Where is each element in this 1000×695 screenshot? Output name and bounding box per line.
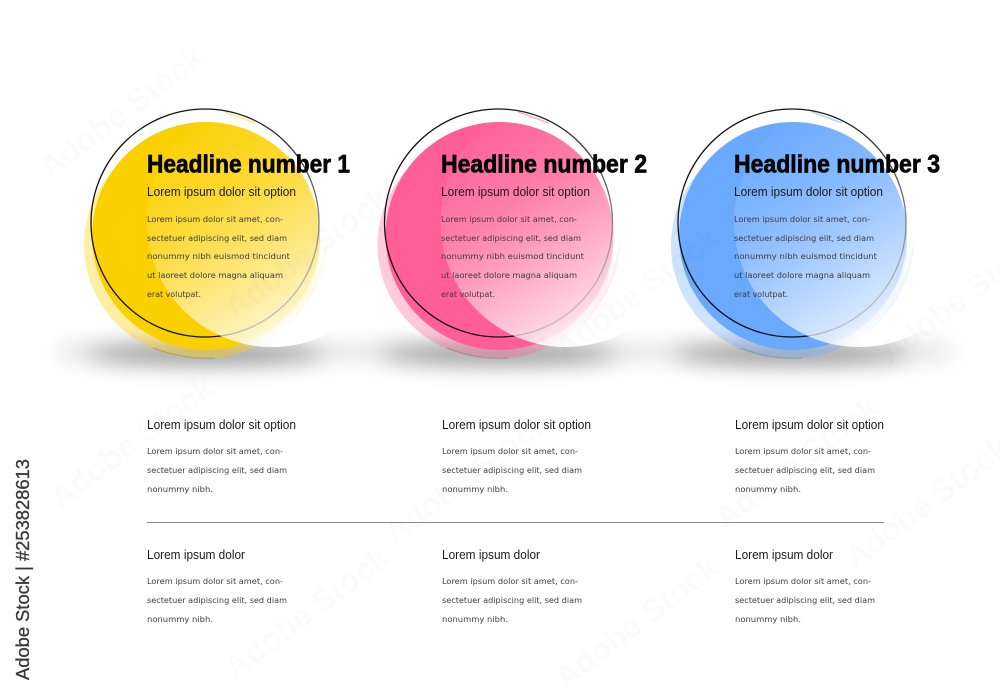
row 2 column 1 text: Lorem ipsum dolor sit amet, con- <box>147 576 283 586</box>
text block: headline 3: Lorem ipsum dolor sit option <box>734 184 883 199</box>
text block: headline 3: Headline number 3 <box>734 150 940 178</box>
text block: headline 1: nonummy nibh euismod tincidunt <box>147 251 291 261</box>
text block: headline 1 <box>147 150 350 299</box>
row 1 column 1 text <box>147 417 296 494</box>
row 2 column 3 text <box>735 547 875 624</box>
row 2 column 1 text: sectetuer adipiscing elit, sed diam <box>147 595 287 605</box>
watermark text: Adobe Stock <box>548 549 726 695</box>
text block: headline 2: ut laoreet dolore magna aliquam <box>441 270 577 280</box>
row 1 column 2 text: nonummy nibh. <box>442 484 508 494</box>
row 2 column 2 text: Lorem ipsum dolor <box>442 547 541 562</box>
watermark text: Adobe Stock <box>33 39 211 186</box>
text block: headline 2: nonummy nibh euismod tincidunt <box>441 251 585 261</box>
row 1 column 3 text: sectetuer adipiscing elit, sed diam <box>735 465 875 475</box>
watermark text: Adobe Stock <box>708 389 886 536</box>
shadow band under circles <box>60 344 950 364</box>
text block: headline 1: Headline number 1 <box>147 150 350 178</box>
row 1 column 1 text: sectetuer adipiscing elit, sed diam <box>147 465 287 475</box>
row 2 column 3 text: Lorem ipsum dolor sit amet, con- <box>735 576 871 586</box>
text block: headline 2: erat volutpat. <box>441 289 495 299</box>
text block: headline 1: erat volutpat. <box>147 289 201 299</box>
row 2 column 3 text: Lorem ipsum dolor <box>735 547 834 562</box>
text block: headline 2: sectetuer adipiscing elit, sed diam <box>441 233 581 243</box>
watermark text: Adobe Stock <box>43 369 221 516</box>
watermark text: Adobe Stock <box>218 179 396 326</box>
text block: headline 1: sectetuer adipiscing elit, sed diam <box>147 233 287 243</box>
text block: headline 3 <box>734 150 940 299</box>
text block: headline 1: Lorem ipsum dolor sit option <box>147 184 296 199</box>
text block: headline 1: Lorem ipsum dolor sit amet, con- <box>147 214 283 224</box>
row 2 column 1 text: Lorem ipsum dolor <box>147 547 246 562</box>
row 1 column 2 text: sectetuer adipiscing elit, sed diam <box>442 465 582 475</box>
row 1 column 1 text: Lorem ipsum dolor sit amet, con- <box>147 446 283 456</box>
text block: headline 1: ut laoreet dolore magna aliquam <box>147 270 283 280</box>
row 1 column 3 text <box>735 417 884 494</box>
row 1 column 1 text: nonummy nibh. <box>147 484 213 494</box>
row 2 column 2 text: sectetuer adipiscing elit, sed diam <box>442 595 582 605</box>
row 2 column 2 text: Lorem ipsum dolor sit amet, con- <box>442 576 578 586</box>
row 2 column 3 text: nonummy nibh. <box>735 614 801 624</box>
circle column 1 yellow <box>84 97 397 359</box>
row 1 column 2 text: Lorem ipsum dolor sit option <box>442 417 591 432</box>
row 2 column 3 text: sectetuer adipiscing elit, sed diam <box>735 595 875 605</box>
text block: headline 2: Lorem ipsum dolor sit option <box>441 184 590 199</box>
row 2 column 2 text: nonummy nibh. <box>442 614 508 624</box>
text block: headline 3: nonummy nibh euismod tincidunt <box>734 251 878 261</box>
circle column 2 pink <box>378 97 690 359</box>
row 1 column 2 text <box>442 417 591 494</box>
row 2 column 1 text: nonummy nibh. <box>147 614 213 624</box>
watermark text: Adobe Stock <box>548 219 726 366</box>
text block: headline 3: sectetuer adipiscing elit, sed diam <box>734 233 874 243</box>
text block: headline 3: ut laoreet dolore magna aliquam <box>734 270 870 280</box>
vertical stock credit: Adobe Stock | #253828613 <box>12 459 33 680</box>
row 1 column 1 text: Lorem ipsum dolor sit option <box>147 417 296 432</box>
circle column 3 blue <box>671 97 984 359</box>
text block: headline 2: Headline number 2 <box>441 150 647 178</box>
watermark text: Adobe Stock <box>378 404 556 551</box>
row 2 column 2 text <box>442 547 582 624</box>
row 2 column 1 text <box>147 547 287 624</box>
text block: headline 3: erat volutpat. <box>734 289 788 299</box>
row 1 column 3 text: Lorem ipsum dolor sit option <box>735 417 884 432</box>
row 1 column 3 text: Lorem ipsum dolor sit amet, con- <box>735 446 871 456</box>
row 1 column 3 text: nonummy nibh. <box>735 484 801 494</box>
text block: headline 2 <box>441 150 647 299</box>
row 1 column 2 text: Lorem ipsum dolor sit amet, con- <box>442 446 578 456</box>
text block: headline 3: Lorem ipsum dolor sit amet, con- <box>734 214 870 224</box>
text block: headline 2: Lorem ipsum dolor sit amet, con- <box>441 214 577 224</box>
watermark text: Adobe Stock <box>218 539 396 686</box>
